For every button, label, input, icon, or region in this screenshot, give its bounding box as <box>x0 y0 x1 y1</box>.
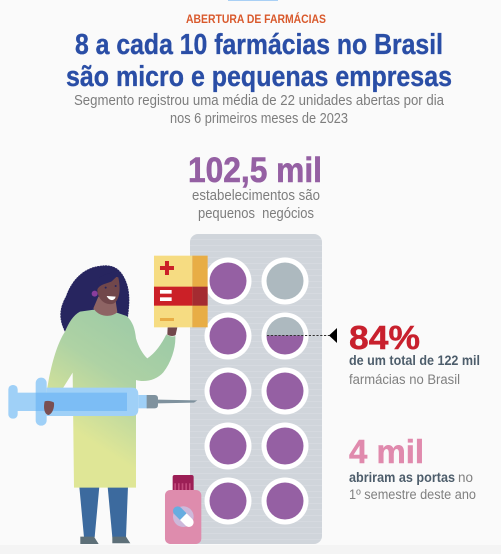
stat caption: estabelecimentos: pequenos negócios <box>198 206 314 222</box>
caption: 4 mil: abriram as portas <box>349 470 455 485</box>
title <box>66 29 452 93</box>
subtitle: nos 6 primeiros meses de 2023 <box>170 111 348 127</box>
neck and face <box>92 272 120 317</box>
caption: 4 mil <box>349 470 476 502</box>
title: 8 a cada 10 farmácias no Brasil <box>75 29 443 61</box>
medicine box <box>154 256 208 327</box>
illustration: woman with syringe <box>8 256 208 544</box>
dress <box>46 310 175 488</box>
syringe <box>8 378 197 426</box>
title: são micro e pequenas empresas <box>66 61 452 93</box>
pointer: dotted line to 84% <box>267 328 337 343</box>
blister pack <box>190 234 322 544</box>
stat: 4 mil: 4 mil <box>349 433 424 470</box>
stat: 84%: 84% <box>349 319 420 356</box>
caption: 4 mil: no <box>458 470 473 485</box>
stat caption: estabelecimentos <box>192 188 320 222</box>
caption: 84%: farmácias no Brasil <box>349 372 460 387</box>
shoes <box>80 537 130 544</box>
right hand <box>167 327 177 336</box>
kicker: ABERTURA DE FARMÁCIAS <box>186 11 326 26</box>
stat: 102,5 mil: 102,5 mil <box>188 151 322 190</box>
left hand <box>44 401 54 415</box>
hair <box>61 266 129 330</box>
caption: 84% <box>349 353 480 387</box>
caption: 4 mil: 1º semestre deste ano <box>349 487 476 502</box>
pill bottle <box>165 475 201 544</box>
subtitle: Segmento registrou uma média de 22 unidades abertas por dia <box>74 93 445 109</box>
stat caption: estabelecimentos: estabelecimentos são <box>192 188 320 204</box>
caption: 84%: de um total de 122 mil <box>349 353 480 368</box>
subtitle <box>74 93 445 127</box>
legs <box>79 487 128 537</box>
